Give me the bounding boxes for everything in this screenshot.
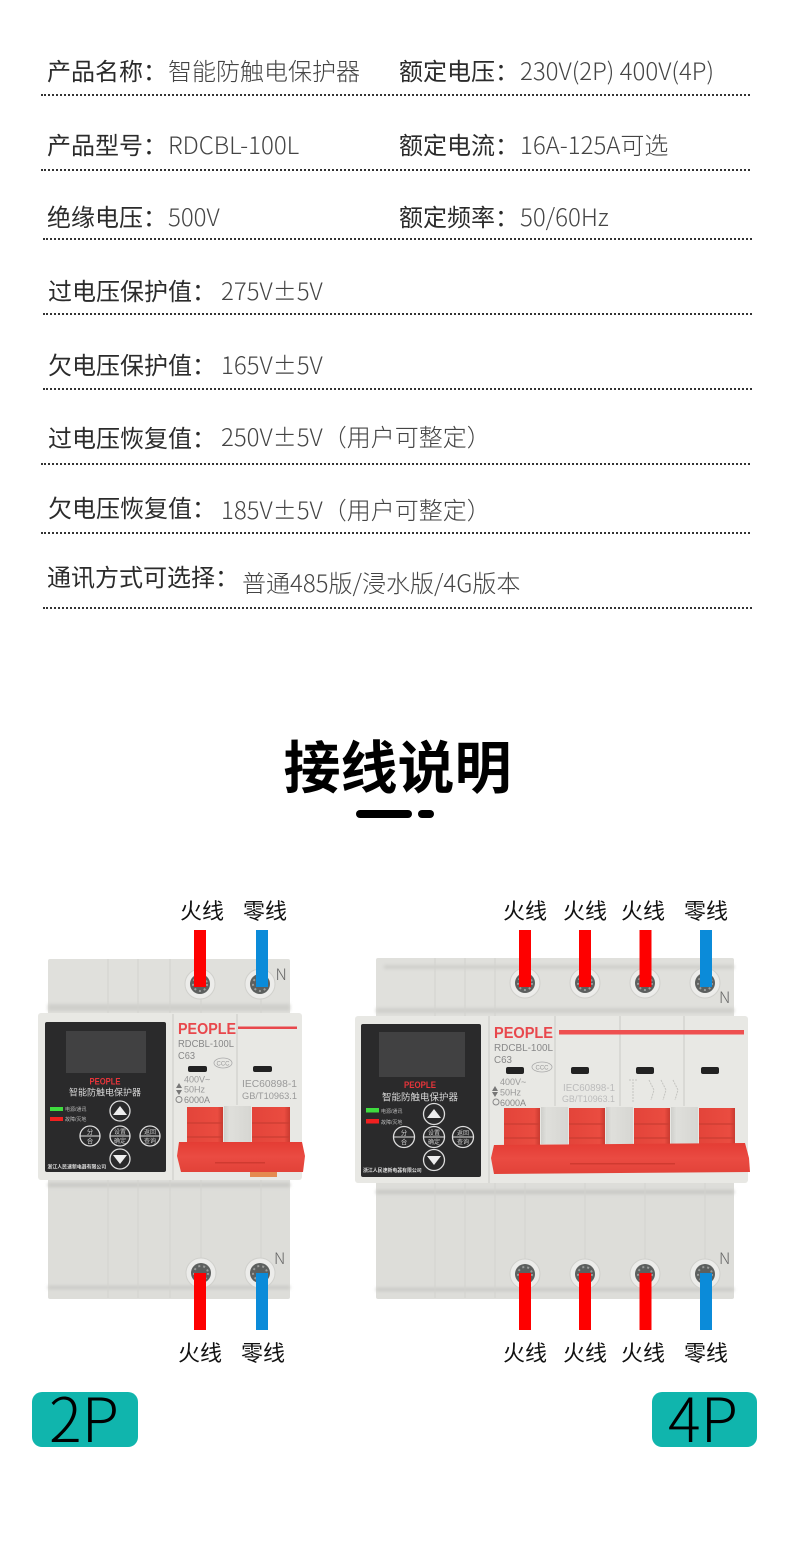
wire labels: 火线 xyxy=(180,899,224,924)
spec row: undervoltage protection: 165V±5V xyxy=(221,346,323,381)
black control panel: 故障/灭地 xyxy=(65,1116,86,1123)
spec row: undervoltage recovery xyxy=(48,489,491,526)
spec row: rated voltage: 230V(2P) 400V(4P) xyxy=(520,52,714,87)
neutral marks: N xyxy=(274,1245,285,1269)
breaker front labels: GB/T10963.1 xyxy=(562,1094,615,1105)
top and bottom rails xyxy=(376,958,734,1299)
badge: 4P xyxy=(652,1371,757,1460)
breaker front labels: C63 xyxy=(178,1050,195,1062)
breaker front labels: CCC xyxy=(216,1062,230,1068)
black control panel: 查询 xyxy=(144,1137,156,1145)
spec row: product name: 智能防触电保护器 xyxy=(168,52,360,87)
breaker front labels: 400V~ xyxy=(500,1077,526,1087)
black control panel: 确定 xyxy=(428,1138,440,1146)
wire labels: 火线 xyxy=(621,1341,665,1366)
wire labels: 火线 xyxy=(563,899,607,924)
wire labels: 零线 xyxy=(241,1341,285,1366)
breaker front labels: IEC60898-1 xyxy=(563,1083,615,1094)
badge: 4P: 4P xyxy=(668,1371,738,1460)
black control panel: 电源/通讯 xyxy=(381,1108,402,1115)
front panel xyxy=(355,1016,748,1183)
spec row: overvoltage protection: 过电压保护值： xyxy=(48,272,216,307)
breaker front labels: RDCBL-100L xyxy=(178,1038,234,1050)
black control panel: 合 xyxy=(401,1137,408,1146)
wire labels: 零线 xyxy=(684,899,728,924)
black control panel: 分 xyxy=(401,1128,408,1137)
black control panel: 合 xyxy=(87,1136,94,1145)
breaker front labels: 50Hz xyxy=(184,1084,206,1094)
red switch handle xyxy=(174,1105,305,1177)
black control panel: PEOPLE xyxy=(404,1080,436,1091)
spec row: overvoltage protection xyxy=(48,272,323,307)
spec row: product name xyxy=(47,52,360,87)
breaker front labels: CCC xyxy=(536,1066,549,1072)
top and bottom rails xyxy=(48,959,290,1299)
spec row: product name: 产品名称： xyxy=(47,52,167,87)
diagram: 2P breaker xyxy=(38,899,305,1366)
badge: 2P: 2P xyxy=(49,1371,119,1460)
neutral marks xyxy=(719,984,730,1269)
spec row: rated frequency: 额定频率： xyxy=(399,198,519,233)
red switch handle xyxy=(491,1107,750,1174)
wire labels xyxy=(178,899,287,1366)
spec row: overvoltage recovery xyxy=(48,418,491,454)
black control panel: 返回 xyxy=(457,1130,469,1137)
black control panel: 设置 xyxy=(428,1129,440,1137)
wire labels: 火线 xyxy=(503,899,547,924)
breaker front labels: 6000A xyxy=(500,1098,526,1108)
black control panel xyxy=(45,1022,166,1172)
spec row: communication xyxy=(47,558,520,599)
badge: 2P xyxy=(32,1371,138,1460)
breaker front labels: PEOPLE xyxy=(178,1021,236,1038)
spec row: rated current: 16A-125A可选 xyxy=(520,126,668,161)
neutral marks: N xyxy=(719,1245,730,1269)
breaker front labels: IEC60898-1 xyxy=(242,1079,297,1090)
spec row: insulation voltage: 绝缘电压： xyxy=(47,198,167,233)
wire labels xyxy=(503,899,728,1366)
breaker front labels: PEOPLE xyxy=(494,1025,553,1042)
wires xyxy=(519,930,712,1330)
breaker front labels: 400V~ xyxy=(184,1074,210,1084)
spec row: undervoltage protection xyxy=(48,346,323,381)
spec row: communication: 通讯方式可选择： xyxy=(47,558,239,593)
black control panel: 浙江人民速新电器有限公司 xyxy=(48,1164,106,1170)
wire labels: 火线 xyxy=(503,1341,547,1366)
breaker front labels: 6000A xyxy=(184,1095,210,1105)
black control panel: 浙江人民速新电器有限公司 xyxy=(363,1167,422,1174)
wires xyxy=(194,930,268,1330)
black control panel: 故障/灭地 xyxy=(381,1119,402,1126)
wire labels: 零线 xyxy=(243,899,287,924)
spec row: rated voltage: 额定电压： xyxy=(399,52,519,87)
black control panel: 电源/通讯 xyxy=(65,1106,86,1113)
breaker front labels: 50Hz xyxy=(500,1088,522,1098)
neutral marks: N xyxy=(276,961,287,985)
spec row: undervoltage recovery: 欠电压恢复值： xyxy=(48,489,216,524)
terminals xyxy=(510,968,720,1289)
spec row: overvoltage protection: 275V±5V xyxy=(221,272,323,307)
spec row: overvoltage recovery: 过电压恢复值： xyxy=(48,419,216,454)
black control panel: 设置 xyxy=(114,1128,126,1136)
black control panel xyxy=(361,1024,481,1177)
spec row: insulation voltage: 500V xyxy=(168,198,220,233)
spec row: rated current: 额定电流： xyxy=(399,126,519,161)
heading underline xyxy=(356,810,434,818)
wire labels: 火线 xyxy=(178,1341,222,1366)
breaker front labels xyxy=(492,1025,744,1108)
neutral marks xyxy=(274,961,287,1269)
black control panel: 返回 xyxy=(144,1129,156,1136)
wire labels: 火线 xyxy=(563,1341,607,1366)
diagram: 4P breaker xyxy=(355,899,750,1366)
wire labels: 零线 xyxy=(684,1341,728,1366)
neutral marks: N xyxy=(719,984,730,1008)
spec row: rated frequency xyxy=(399,198,609,233)
spec row: rated current xyxy=(399,126,668,161)
black control panel: 智能防触电保护器 xyxy=(382,1092,458,1104)
spec row: undervoltage protection: 欠电压保护值： xyxy=(48,346,216,381)
heading: 接线说明 xyxy=(284,723,512,805)
spec row: model: RDCBL-100L xyxy=(168,126,299,161)
black control panel: 查询 xyxy=(457,1138,469,1146)
spec row: model: 产品型号： xyxy=(47,126,167,161)
black control panel: 分 xyxy=(87,1127,94,1136)
spec row: rated voltage xyxy=(399,52,714,87)
spec row: overvoltage recovery: 250V±5V（用户可整定） xyxy=(221,418,491,453)
black control panel: 确定 xyxy=(114,1137,126,1145)
front panel xyxy=(38,1013,302,1180)
breaker front labels: GB/T10963.1 xyxy=(242,1091,297,1102)
spec row: communication: 普通485版/浸水版/4G版本 xyxy=(242,564,520,599)
breaker front labels xyxy=(176,1021,297,1105)
spec row: rated frequency: 50/60Hz xyxy=(520,198,609,233)
spec row: insulation voltage xyxy=(47,198,220,233)
wire labels: 火线 xyxy=(621,899,665,924)
spec row: model xyxy=(47,126,299,161)
breaker front labels: RDCBL-100L xyxy=(494,1042,553,1054)
black control panel: 智能防触电保护器 xyxy=(69,1086,141,1098)
terminals xyxy=(185,969,275,1288)
spec row: undervoltage recovery: 185V±5V（用户可整定） xyxy=(221,491,491,526)
breaker front labels: C63 xyxy=(494,1054,512,1066)
black control panel: PEOPLE xyxy=(90,1076,120,1088)
